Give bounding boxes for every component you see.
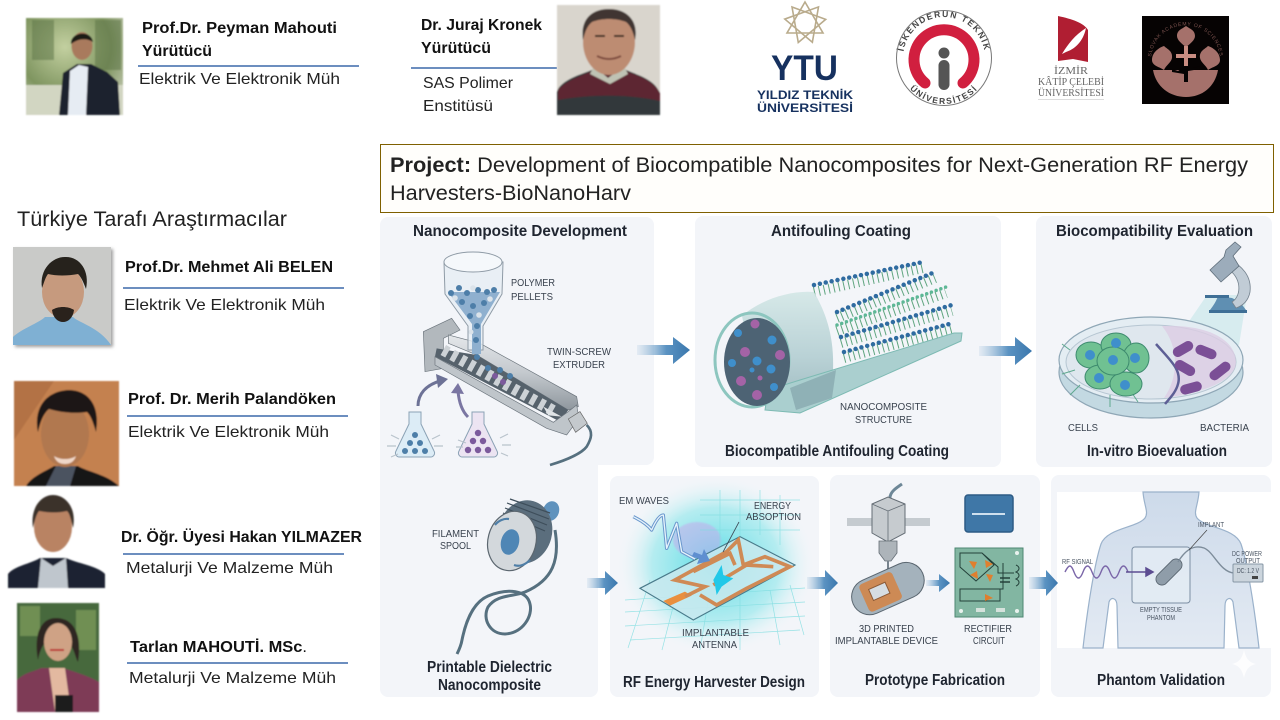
label: nanocomposite structure: NANOCOMPOSITE	[840, 401, 927, 413]
icon: YTU star	[785, 0, 832, 42]
text: Hakan Yılmazer: Metalurji Ve Malzeme Müh	[126, 560, 333, 577]
signal arrow	[1126, 568, 1153, 576]
implant capsule	[1153, 556, 1185, 588]
label: energy absorption: ENERGY	[754, 500, 791, 512]
purple glow	[673, 522, 721, 558]
label: DC power output: DC POWER	[1232, 551, 1262, 558]
microscope	[1205, 242, 1250, 313]
text: Juraj Kronek	[411, 17, 557, 115]
label: polymer pellets: POLYMER	[511, 277, 555, 289]
photo: Tarlan Mahouti	[17, 603, 99, 712]
label: cells: CELLS	[1068, 422, 1098, 434]
text: Juraj Kronek: Enstitüsü	[423, 98, 493, 115]
project title box: Harvesters-BioNanoHarv	[390, 182, 632, 205]
label: bacteria: BACTERIA	[1200, 422, 1249, 434]
bacteria	[1171, 339, 1233, 396]
label: RF signal: RF SIGNAL	[1062, 559, 1093, 566]
arrow: fabrication to validation	[807, 570, 838, 596]
caption: Biocompatible Antifouling Coating	[725, 443, 949, 460]
phantom photo area	[1057, 492, 1272, 648]
label: implantable antenna: IMPLANTABLE	[682, 627, 749, 639]
text: Juraj Kronek: SAS Polimer	[423, 75, 514, 92]
text: Mehmet Ali Belen: Elektrik Ve Elektronik Müh	[124, 297, 325, 314]
field grid	[625, 490, 805, 650]
text: Peyman Mahouti: Elektrik Ve Elektronik Müh	[139, 71, 340, 88]
caption: Printable Dielectric	[427, 659, 552, 676]
rectifier circuit board	[955, 548, 1023, 617]
panel: RF energy harvester design	[610, 476, 819, 697]
panel: phantom validation	[1051, 475, 1272, 697]
logo: Yıldız Teknik Üniversitesi: ÜNİVERSİTESİ	[757, 100, 853, 115]
logo: Yıldız Teknik Üniversitesi: YILDIZ TEKNİK	[757, 87, 853, 102]
label: rectifier circuit: CIRCUIT	[973, 635, 1005, 647]
caption	[427, 659, 552, 694]
label: nanocomposite structure: STRUCTURE	[855, 414, 912, 426]
text: Juraj Kronek: Yürütücü	[421, 40, 491, 57]
text: Hakan Yılmazer: Dr. Öğr. Üyesi Hakan YILMAZER	[121, 527, 362, 546]
label: energy absorption: ABSOPTION	[746, 511, 801, 523]
extruder	[423, 318, 591, 465]
heading: Turkish researchers: Türkiye Tarafı Araştırmacılar	[17, 208, 287, 231]
light beam	[1181, 295, 1247, 345]
antenna board	[640, 537, 795, 620]
logo: İskenderun Teknik Üniversitesi: ÜNİVERSİTESİ	[910, 84, 977, 104]
label: 3D printed implantable device: IMPLANTABLE DEVICE	[835, 635, 938, 647]
label: implant: IMPLANT	[1198, 522, 1225, 529]
panel: antifouling coating	[695, 216, 1001, 467]
coated cylinder	[715, 292, 962, 413]
label: filament spool: SPOOL	[440, 540, 471, 552]
text: Hakan Yılmazer	[121, 527, 362, 577]
DC output box	[1233, 564, 1263, 582]
label: 3D printed implantable device	[835, 623, 938, 647]
label: DC power output: OUTPUT	[1236, 558, 1261, 565]
arrow: to antenna design	[587, 571, 618, 595]
photo: Mehmet Ali Belen	[13, 247, 111, 345]
arrow: to biocompatibility	[979, 337, 1032, 365]
blue module	[965, 495, 1013, 532]
printed capsule	[846, 557, 930, 620]
caption: Phantom Validation	[1097, 672, 1225, 689]
arrow: to phantom	[1029, 570, 1058, 596]
bristles	[814, 262, 953, 358]
heading: Nanocomposite Development	[413, 223, 627, 240]
label: twin-screw extruder: EXTRUDER	[553, 359, 605, 371]
label: twin-screw extruder: TWIN-SCREW	[547, 346, 611, 358]
label: empty tissue phantom: PHANTOM	[1147, 615, 1175, 622]
text: Merih Palandöken: Prof. Dr. Merih Palandöken	[128, 391, 336, 408]
leader line	[723, 522, 739, 552]
text: Merih Palandöken: Elektrik Ve Elektronik Müh	[128, 424, 329, 441]
arrow: capsule to circuit	[926, 574, 950, 592]
power wire	[1178, 547, 1234, 573]
logo: İzmir Kâtip Çelebi Üniversitesi: İZMİR	[1054, 65, 1088, 77]
photo: Juraj Kronek	[557, 5, 660, 115]
label: nanocomposite structure	[840, 401, 927, 426]
implant leader	[1189, 530, 1207, 550]
logo: Slovak Academy of Sciences: SLOVAK ACADEMY OF SCIENCES	[1148, 22, 1223, 56]
label: rectifier circuit: RECTIFIER	[964, 623, 1012, 635]
3D printer head	[847, 484, 930, 575]
arrow: to coating	[637, 337, 690, 364]
photo: Merih Palandöken	[14, 381, 119, 486]
label: energy absorption	[746, 500, 801, 523]
text: Peyman Mahouti: Prof.Dr. Peyman Mahouti	[142, 20, 337, 37]
tissue phantom window	[1132, 547, 1190, 603]
text: Juraj Kronek: Dr. Juraj Kronek	[421, 17, 542, 34]
label: DC power output	[1232, 551, 1262, 565]
cells	[1062, 333, 1149, 407]
label: EM waves: EM WAVES	[619, 495, 669, 507]
label: empty tissue phantom: EMPTY TISSUE	[1140, 607, 1182, 614]
caption: Nanocomposite	[438, 677, 541, 694]
text: Tarlan Mahouti	[127, 638, 348, 687]
logo: Yıldız Teknik Üniversitesi	[757, 0, 853, 115]
project title box: Project: Development of Biocompatible Nanocomposites for Next-Generation RF Energy	[390, 154, 1249, 177]
additive flasks and arrows	[387, 374, 511, 457]
filament spool	[481, 494, 562, 576]
panel: nanocomposite development	[380, 217, 654, 697]
heading: Biocompatibility Evaluation	[1056, 223, 1253, 240]
interaction arrow	[1156, 344, 1179, 404]
text: Mehmet Ali Belen: Prof.Dr. Mehmet Ali BELEN	[125, 259, 333, 276]
RF signal wave	[1065, 566, 1128, 578]
label: polymer pellets	[511, 277, 555, 303]
text: Peyman Mahouti	[138, 20, 359, 88]
logo: Yıldız Teknik Üniversitesi: YTU	[771, 49, 838, 88]
text: Mehmet Ali Belen	[123, 259, 344, 314]
filament strand	[457, 530, 556, 654]
panel: biocompatibility evaluation	[1036, 216, 1272, 467]
petri dish	[1059, 317, 1243, 418]
logo: İskenderun Teknik Üniversitesi: İSKENDERUN TEKNİK	[896, 11, 990, 52]
text: Tarlan Mahouti: Tarlan MAHOUTİ. MSc .	[130, 638, 307, 656]
label: implantable antenna: ANTENNA	[692, 639, 737, 651]
photo: Hakan Yılmazer	[8, 495, 105, 588]
DC output box: DC: 1.2 V	[1237, 568, 1259, 575]
caption: In-vitro Bioevaluation	[1087, 443, 1227, 460]
hopper with pellets	[444, 252, 513, 385]
label: filament spool: FILAMENT	[432, 528, 480, 540]
glowing field	[618, 477, 814, 653]
caption: Prototype Fabrication	[865, 672, 1005, 689]
logo: Slovak Academy of Sciences	[1142, 16, 1229, 104]
panel: prototype fabrication	[830, 475, 1040, 697]
logo: İzmir Kâtip Çelebi Üniversitesi: KÂTİP ÇELEBİ	[1038, 76, 1104, 88]
torso	[1083, 492, 1259, 648]
label: filament spool	[432, 528, 480, 552]
text: Merih Palandöken	[127, 391, 348, 441]
heading: Antifouling Coating	[771, 223, 911, 240]
incoming arrow	[692, 549, 710, 564]
label: rectifier circuit	[964, 623, 1012, 647]
label: implantable antenna	[682, 627, 749, 651]
logo: İzmir Kâtip Çelebi Üniversitesi	[1038, 16, 1104, 100]
label: polymer pellets: PELLETS	[511, 291, 553, 303]
label: twin-screw extruder	[547, 346, 611, 371]
logo: İzmir Kâtip Çelebi Üniversitesi: ÜNİVERSİTESİ	[1038, 87, 1104, 99]
project title box	[380, 144, 1274, 212]
photo: Peyman Mahouti	[26, 18, 123, 115]
text: Peyman Mahouti: Yürütücü	[142, 43, 212, 60]
caption: RF Energy Harvester Design	[623, 674, 805, 691]
label: 3D printed implantable device: 3D PRINTED	[859, 623, 914, 635]
EM waves	[633, 515, 695, 559]
label: empty tissue phantom	[1140, 607, 1182, 622]
text: Tarlan Mahouti: Metalurji Ve Malzeme Müh	[129, 670, 336, 687]
logo: İskenderun Teknik Üniversitesi	[896, 10, 992, 106]
sparkle	[1232, 650, 1256, 678]
